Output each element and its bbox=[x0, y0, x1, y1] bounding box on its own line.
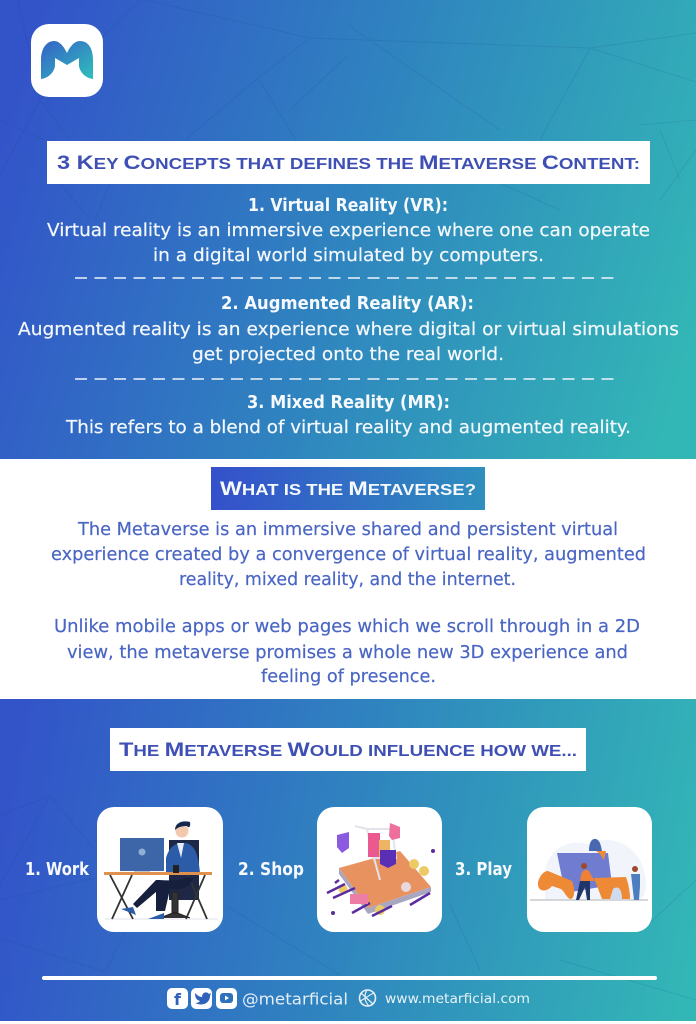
text block: metaverse definition: experience created by a convergence of virtual reality, augmented bbox=[51, 545, 646, 565]
text block: metaverse versus apps: view, the metaverse promises a whole new 3D experience and bbox=[67, 643, 628, 663]
text block: augmented reality: 2. Augmented Reality (AR): bbox=[221, 293, 474, 314]
text block: virtual reality: Virtual reality is an immersive experience where one can operate bbox=[47, 221, 650, 241]
text block: metaverse versus apps: Unlike mobile apps or web pages which we scroll through in a 2D bbox=[54, 617, 640, 637]
text block: metaverse definition bbox=[51, 520, 646, 590]
card: work illustration bbox=[97, 807, 223, 932]
text block: augmented reality: get projected onto the real world. bbox=[192, 345, 504, 365]
card: shop illustration bbox=[317, 807, 442, 932]
text block: metaverse definition: reality, mixed reality, and the internet. bbox=[179, 570, 516, 590]
label: 1. Work: 1. Work bbox=[25, 859, 90, 880]
heading: what is the metaverse: WHAT IS THE METAVERSE? bbox=[220, 478, 476, 500]
text block: augmented reality: Augmented reality is an experience where digital or virtual simulations bbox=[18, 320, 679, 340]
heading: what is the metaverse bbox=[211, 467, 485, 510]
panel: bottom gradient background bbox=[0, 699, 696, 1021]
footer: website: www.metarficial.com bbox=[385, 991, 530, 1007]
heading: 3 key concepts bbox=[47, 141, 650, 184]
text block: augmented reality bbox=[18, 293, 679, 365]
label: 2. Shop: 2. Shop bbox=[238, 859, 304, 880]
heading: 3 key concepts: 3 K EY CONCEPTS THAT DEFINES THE METAVERSE CONTENT: bbox=[57, 152, 640, 174]
text block: metaverse versus apps: feeling of presence. bbox=[261, 667, 436, 687]
footer: social icons and handle: @metarficial bbox=[242, 990, 348, 1008]
text block: metaverse definition: The Metaverse is an immersive shared and persistent virtual bbox=[77, 520, 618, 540]
card: play illustration bbox=[527, 807, 652, 932]
footer: social icons and handle: f bbox=[174, 990, 182, 1009]
heading: metaverse would influence: THE METAVERSE WOULD INFLUENCE HOW WE... bbox=[119, 739, 577, 761]
text block: virtual reality: in a digital world simulated by computers. bbox=[153, 246, 544, 266]
label: 3. Play: 3. Play bbox=[455, 859, 512, 880]
text block: virtual reality bbox=[47, 195, 650, 266]
text block: mixed reality: This refers to a blend of virtual reality and augmented reality. bbox=[65, 418, 631, 438]
panel: top gradient background bbox=[0, 0, 696, 459]
text block: mixed reality: 3. Mixed Reality (MR): bbox=[247, 392, 450, 413]
text block: mixed reality bbox=[65, 392, 631, 438]
logo: Metarficial M bbox=[31, 24, 103, 97]
divider: footer rule bbox=[42, 976, 657, 980]
footer: social icons and handle bbox=[167, 988, 348, 1009]
text block: virtual reality: 1. Virtual Reality (VR): bbox=[248, 195, 448, 216]
text block: metaverse versus apps bbox=[54, 617, 640, 687]
heading: metaverse would influence bbox=[110, 728, 586, 771]
